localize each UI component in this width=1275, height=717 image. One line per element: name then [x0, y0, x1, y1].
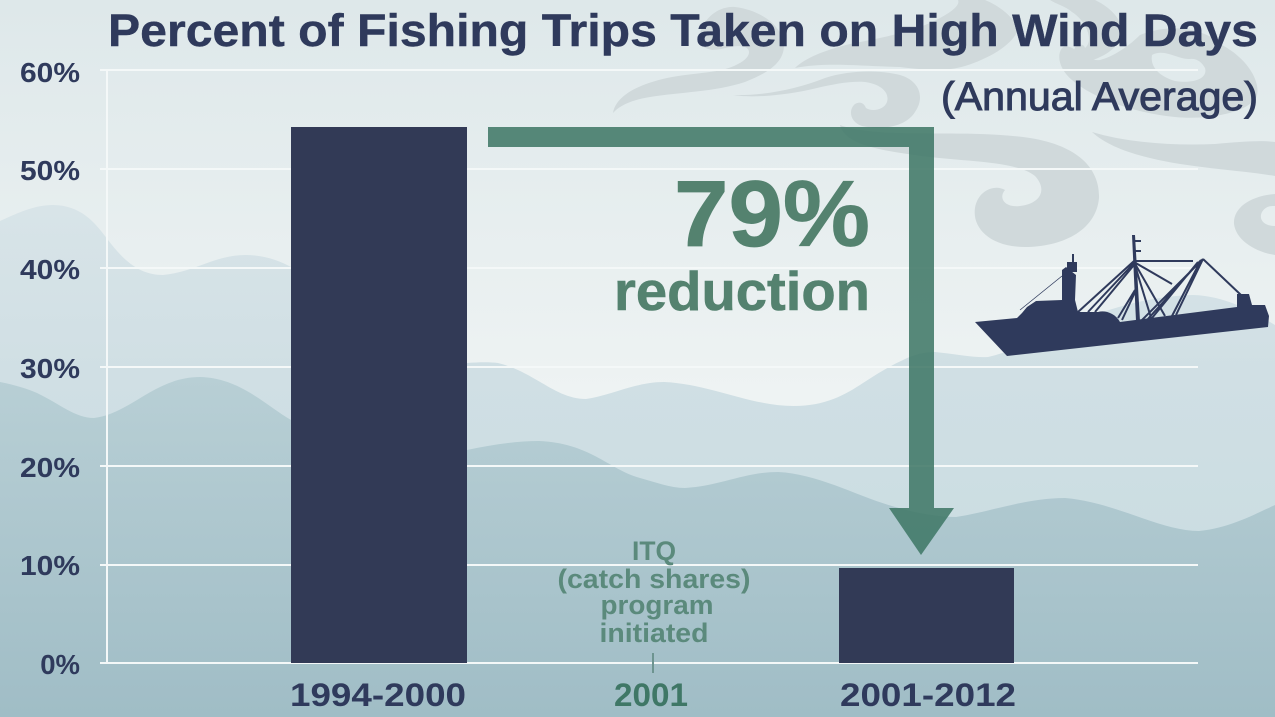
- annotation: ITQ program: program: [600, 590, 714, 620]
- y axis labels: 20%: [20, 452, 80, 483]
- title: Percent of Fishing Trips Taken on High Wind Days: [108, 5, 1258, 56]
- annotation: ITQ program: [558, 536, 750, 648]
- x axis labels: 2001: [614, 677, 688, 713]
- grid lines: [100, 70, 1198, 663]
- subtitle: (Annual Average): [941, 75, 1258, 119]
- y axis labels: 50%: [20, 155, 80, 186]
- x axis labels: 1994-2000: [290, 677, 466, 713]
- y axis labels: [20, 57, 80, 680]
- 2001 tick: [652, 653, 654, 673]
- x axis labels: 2001-2012: [840, 677, 1016, 713]
- front wave: [0, 377, 1275, 717]
- y axis labels: 10%: [20, 550, 80, 581]
- y axis labels: 30%: [20, 353, 80, 384]
- x axis labels: [290, 677, 1016, 713]
- annotation: ITQ program: (catch shares): [558, 564, 750, 594]
- y axis labels: 40%: [20, 254, 80, 285]
- arrow: reduction: [488, 127, 954, 555]
- annotation: ITQ program: ITQ: [632, 536, 676, 566]
- icon: fishing boat: [975, 235, 1269, 356]
- bar: 1994-2000: [291, 127, 467, 663]
- callout: reduction: reduction: [614, 260, 870, 322]
- back wave: [0, 205, 1275, 717]
- annotation: ITQ program: initiated: [600, 618, 708, 648]
- y axis labels: 0%: [40, 649, 80, 680]
- bar: 2001-2012: [839, 568, 1014, 663]
- y axis labels: 60%: [20, 57, 80, 88]
- callout: 79%: 79%: [674, 161, 870, 266]
- waves: [0, 205, 1275, 717]
- wind swirls: [613, 0, 1275, 255]
